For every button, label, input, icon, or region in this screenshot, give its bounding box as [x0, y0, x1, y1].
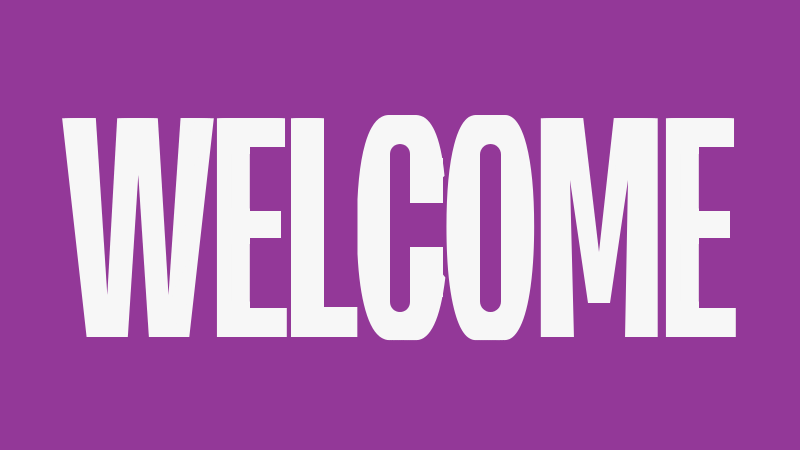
title: WELCOME: O — [443, 50, 509, 405]
title: WELCOME: E — [210, 50, 270, 405]
title: WELCOME: L — [284, 50, 339, 405]
title: WELCOME: E — [660, 50, 719, 405]
title: WELCOME: C — [352, 50, 421, 405]
title: WELCOME: W — [62, 50, 193, 405]
title: WELCOME — [62, 50, 736, 405]
title: WELCOME: M — [532, 50, 641, 405]
